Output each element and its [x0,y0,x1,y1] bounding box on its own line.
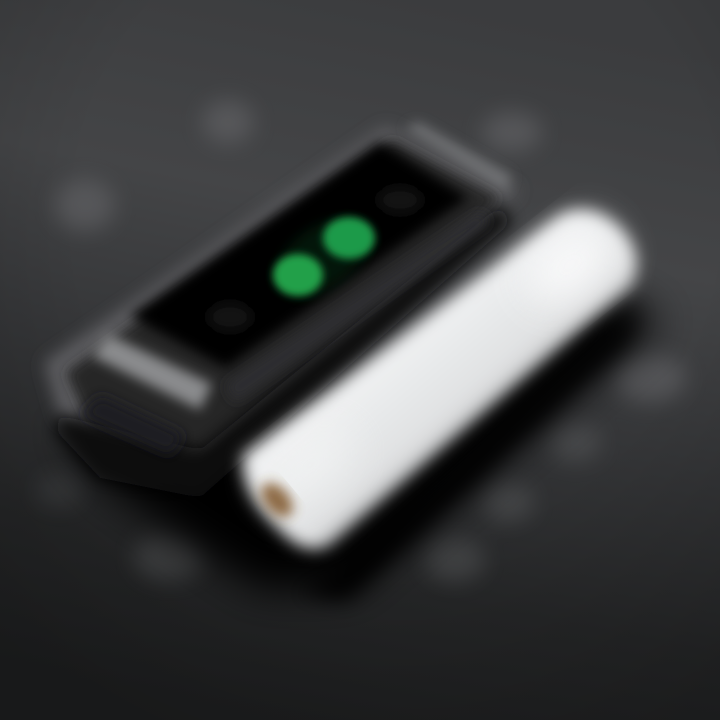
cylinder body [243,210,636,549]
green lights [262,203,382,311]
green glow [262,203,382,311]
cylinder brown end cap [255,477,299,523]
shadow under device and cylinder [60,290,660,590]
device: grey label strip [92,334,212,410]
green light right [323,217,375,259]
device outer rim [44,126,520,470]
device lower dark edge [55,205,512,498]
green light left [273,254,323,296]
cylinder bottom-left highlight [253,412,367,518]
white cylinder [243,210,640,600]
cylinder shadow edge [300,305,640,600]
device screen dim icons [208,187,422,331]
device body [66,140,500,470]
background: faint floating spots [36,100,686,582]
device top right light edge [405,122,512,192]
device screen [130,142,468,368]
device: lower port area [80,395,185,455]
device mid grey stripe [225,212,490,402]
device: black body [44,122,520,498]
cylinder top highlight [512,211,628,319]
